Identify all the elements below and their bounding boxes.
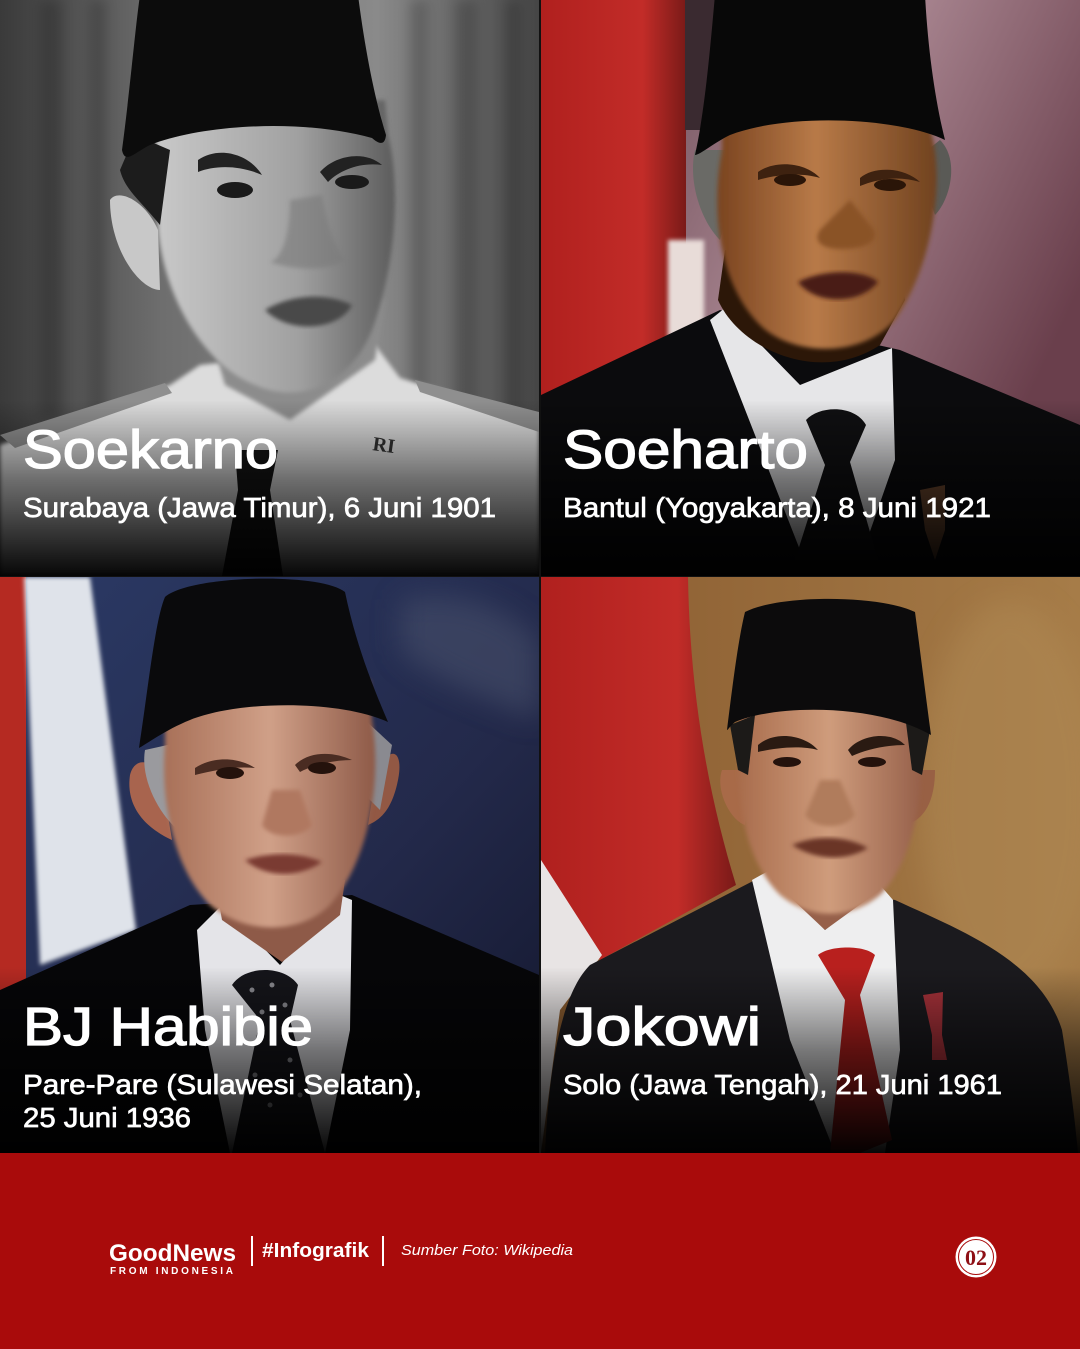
name: BJ Habibie: BJ Habibie bbox=[23, 997, 313, 1057]
bottom shade bbox=[541, 400, 1080, 576]
panel: BJ Habibie bbox=[0, 577, 539, 1153]
bottom shade bbox=[541, 967, 1080, 1153]
portrait: Jokowi bbox=[541, 577, 1080, 1153]
panel: Soeharto bbox=[541, 0, 1080, 576]
bottom shade bbox=[0, 400, 539, 576]
name: Soeharto: Soeharto bbox=[563, 420, 808, 480]
birth info: BJ Habibie: 25 Juni 1936 bbox=[23, 1102, 191, 1133]
birth info: BJ Habibie: Pare-Pare (Sulawesi Selatan), bbox=[23, 1069, 422, 1100]
panel: footer bbox=[0, 1153, 1080, 1349]
birth info: Soeharto: Bantul (Yogyakarta), 8 Juni 1921 bbox=[563, 492, 991, 523]
panel: Soekarno bbox=[0, 0, 539, 576]
birth info: Jokowi: Solo (Jawa Tengah), 21 Juni 1961 bbox=[563, 1069, 1002, 1100]
name: Soekarno: Soekarno bbox=[23, 420, 278, 480]
page number badge bbox=[956, 1236, 996, 1278]
hashtag: #Infografik bbox=[262, 1240, 370, 1262]
birth info: BJ Habibie bbox=[24, 1074, 420, 1128]
name: Jokowi: Jokowi bbox=[563, 997, 761, 1057]
bottom shade bbox=[0, 973, 351, 1153]
birth info: Soekarno: Surabaya (Jawa Timur), 6 Juni 1901 bbox=[23, 492, 496, 523]
portrait: Soekarno: RI bbox=[371, 433, 397, 458]
portrait: BJ Habibie bbox=[0, 577, 539, 1153]
page number badge: 02 bbox=[965, 1245, 987, 1270]
portrait: Soekarno bbox=[0, 0, 539, 576]
logo: GoodNews from Indonesia: GoodNews bbox=[109, 1240, 236, 1267]
source credit: Sumber Foto: Wikipedia bbox=[401, 1242, 573, 1259]
panel: Jokowi bbox=[541, 577, 1080, 1153]
portrait: Soeharto bbox=[541, 0, 1080, 576]
logo: GoodNews from Indonesia: FROM INDONESIA bbox=[110, 1266, 233, 1277]
